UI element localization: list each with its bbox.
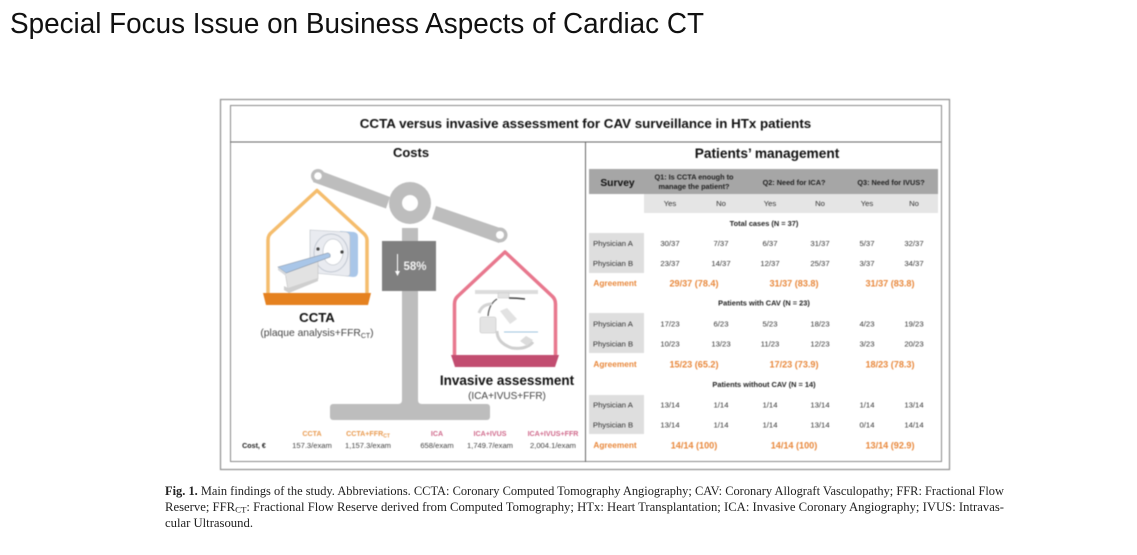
table section: patients without CAV: 1/14 — [714, 400, 729, 410]
label: CCTA: (plaque analysis+FFR — [260, 328, 361, 339]
table section: patients without CAV: 13/14 — [660, 420, 680, 430]
table section: patients with CAV: Patients with CAV (N = 23) — [718, 298, 810, 308]
table section: patients with CAV: 3/23 — [860, 340, 874, 348]
table section: patients without CAV: 1/14 — [763, 400, 778, 410]
table section: total cases: 30/37 — [660, 239, 680, 248]
callout: 58% reduction — [382, 241, 436, 291]
table section: patients with CAV: 13/23 — [711, 340, 731, 348]
table section: total cases: Total cases (N = 37) — [730, 219, 799, 228]
table section: patients with CAV: Physician B — [593, 340, 633, 348]
caption: : Fractional Flow Reserve derived from Computed Tomography; HTx: Heart Transplantation; ICA: Invasive Coronary Angiography; IVUS: Intravas- — [246, 500, 1004, 514]
survey table header: Q1: Is CCTA enough to — [654, 172, 734, 182]
table section: total cases: Agreement — [593, 278, 637, 288]
cost table: ICA+IVUS+FFR — [528, 430, 578, 438]
table section: patients with CAV: 18/23 (78.3) — [865, 360, 915, 370]
cost table: 1,749.7/exam — [467, 441, 513, 450]
outer frame — [220, 100, 950, 470]
table section: patients without CAV: 13/14 — [810, 400, 830, 410]
table section: total cases: Physician B — [593, 259, 633, 268]
table section: patients without CAV: 0/14 — [860, 420, 875, 430]
cost table: 658/exam — [420, 441, 454, 450]
icon: CCTA house — [263, 190, 371, 305]
label: CCTA — [260, 310, 374, 340]
callout: 58% reduction: 58% — [403, 261, 427, 273]
table section: total cases: 31/37 (83.8) — [769, 278, 819, 288]
survey table header: Yes — [764, 199, 776, 208]
figure heading: CCTA versus invasive assessment for CAV surveillance in HTx patients — [360, 116, 811, 131]
figure — [220, 100, 950, 470]
table section: patients with CAV: Physician A — [593, 320, 634, 328]
table section: total cases: 23/37 — [660, 259, 680, 268]
survey table header: No — [909, 199, 919, 208]
table section: patients with CAV: 18/23 — [810, 320, 830, 328]
label: CCTA: ) — [370, 328, 374, 339]
table section: patients without CAV: Physician A — [593, 400, 634, 410]
panel: patients' management — [589, 146, 938, 450]
table section: total cases: 12/37 — [760, 259, 780, 268]
cost table: 2,004.1/exam — [530, 441, 576, 450]
table section: total cases — [589, 219, 924, 288]
survey table header: Yes — [861, 199, 873, 208]
survey table header: Yes — [664, 199, 676, 208]
table section: patients without CAV: 1/14 — [763, 420, 778, 430]
table section: total cases: 6/37 — [763, 239, 777, 248]
caption: Fig. 1. Main findings of the study. Abbreviations. CCTA: Coronary Computed Tomography Angiography; CAV: Coronary Allograft Vasculopathy; FFR: Fractional Flow — [165, 484, 1004, 498]
title: Special Focus Issue on Business Aspects of Cardiac CT — [10, 8, 704, 40]
table section: patients with CAV: 10/23 — [660, 340, 680, 348]
icon: CT scanner — [278, 230, 358, 293]
table section: patients without CAV: 1/14 — [860, 400, 875, 410]
table section: total cases: 3/37 — [860, 259, 874, 268]
label: invasive assessment — [440, 373, 575, 402]
survey table header: No — [815, 199, 825, 208]
table section: patients with CAV: 5/23 — [763, 320, 777, 328]
survey table header: Q3: Need for IVUS? — [857, 178, 925, 187]
table section: total cases: Physician A — [593, 239, 634, 248]
table section: patients without CAV: 14/14 (100) — [671, 440, 717, 450]
label: invasive assessment: Invasive assessment — [440, 373, 575, 388]
table section: patients without CAV: Patients without CAV (N = 14) — [712, 380, 816, 389]
table section: total cases: 14/37 — [711, 259, 731, 268]
table section: patients without CAV: 13/14 — [810, 420, 830, 430]
table section: patients with CAV: 17/23 (73.9) — [769, 360, 819, 370]
table section: patients with CAV — [589, 298, 924, 370]
cost table: ICA — [431, 430, 443, 438]
table section: patients without CAV: 14/14 (100) — [771, 440, 817, 450]
survey table header: Survey — [600, 178, 635, 189]
costs heading: Costs — [393, 145, 429, 160]
label: CCTA: CT — [361, 333, 371, 340]
cost table: 1,157.3/exam — [345, 441, 391, 450]
table section: total cases: 34/37 — [904, 259, 924, 268]
table section: total cases: 29/37 (78.4) — [669, 278, 719, 288]
table section: patients without CAV: 13/14 (92.9) — [865, 440, 915, 450]
cost table: 157.3/exam — [292, 441, 332, 450]
table section: patients without CAV: Physician B — [593, 420, 633, 430]
table section: total cases: 25/37 — [810, 259, 830, 268]
caption: Reserve; FFR — [165, 500, 232, 514]
table section: patients with CAV: 11/23 — [761, 340, 779, 348]
table section: total cases: 31/37 (83.8) — [865, 278, 915, 288]
cost table: ICA+IVUS — [474, 430, 507, 438]
table section: total cases: 31/37 — [810, 239, 830, 248]
survey table header: Q2: Need for ICA? — [763, 178, 826, 187]
table section: patients with CAV: 15/23 (65.2) — [669, 360, 719, 370]
table section: patients with CAV: 4/23 — [860, 320, 874, 328]
table section: patients without CAV: 13/14 — [904, 400, 924, 410]
inner frame — [230, 106, 942, 462]
cost table: CT — [383, 434, 390, 440]
label: CCTA: CCTA — [299, 310, 335, 325]
cost table — [242, 430, 578, 450]
table section: total cases: 32/37 — [904, 239, 924, 248]
icon: invasive assessment house — [451, 252, 559, 367]
table section: patients without CAV — [589, 380, 924, 450]
caption: cular Ultrasound. — [165, 516, 253, 530]
table section: total cases: 5/37 — [860, 239, 874, 248]
table section: patients without CAV: 14/14 — [904, 420, 924, 430]
table section: patients with CAV: 20/23 — [904, 340, 924, 348]
table section: patients with CAV: 6/23 — [714, 320, 728, 328]
table section: patients without CAV: 1/14 — [714, 420, 729, 430]
icon: C-arm — [475, 290, 538, 348]
cost table: Cost, € — [242, 442, 266, 450]
scale — [311, 169, 508, 420]
cost table: CCTA — [302, 430, 322, 438]
table section: total cases: 7/37 — [714, 239, 728, 248]
survey table header — [589, 169, 938, 213]
cost table: CCTA+FFR — [346, 430, 383, 438]
survey table header: No — [716, 199, 726, 208]
table section: patients without CAV: 13/14 — [660, 400, 680, 410]
caption: CT — [235, 504, 247, 514]
survey table header: manage the patient? — [659, 182, 730, 191]
panel: costs — [242, 145, 578, 450]
table section: patients with CAV: 17/23 — [660, 320, 680, 328]
table section: patients with CAV: 12/23 — [810, 340, 830, 348]
table section: patients with CAV: Agreement — [593, 359, 637, 369]
label: invasive assessment: (ICA+IVUS+FFR) — [468, 391, 546, 402]
table section: patients with CAV: 19/23 — [904, 320, 924, 328]
management heading: Patients’ management — [695, 146, 840, 161]
caption — [165, 484, 1004, 530]
table section: patients without CAV: Agreement — [593, 440, 637, 450]
